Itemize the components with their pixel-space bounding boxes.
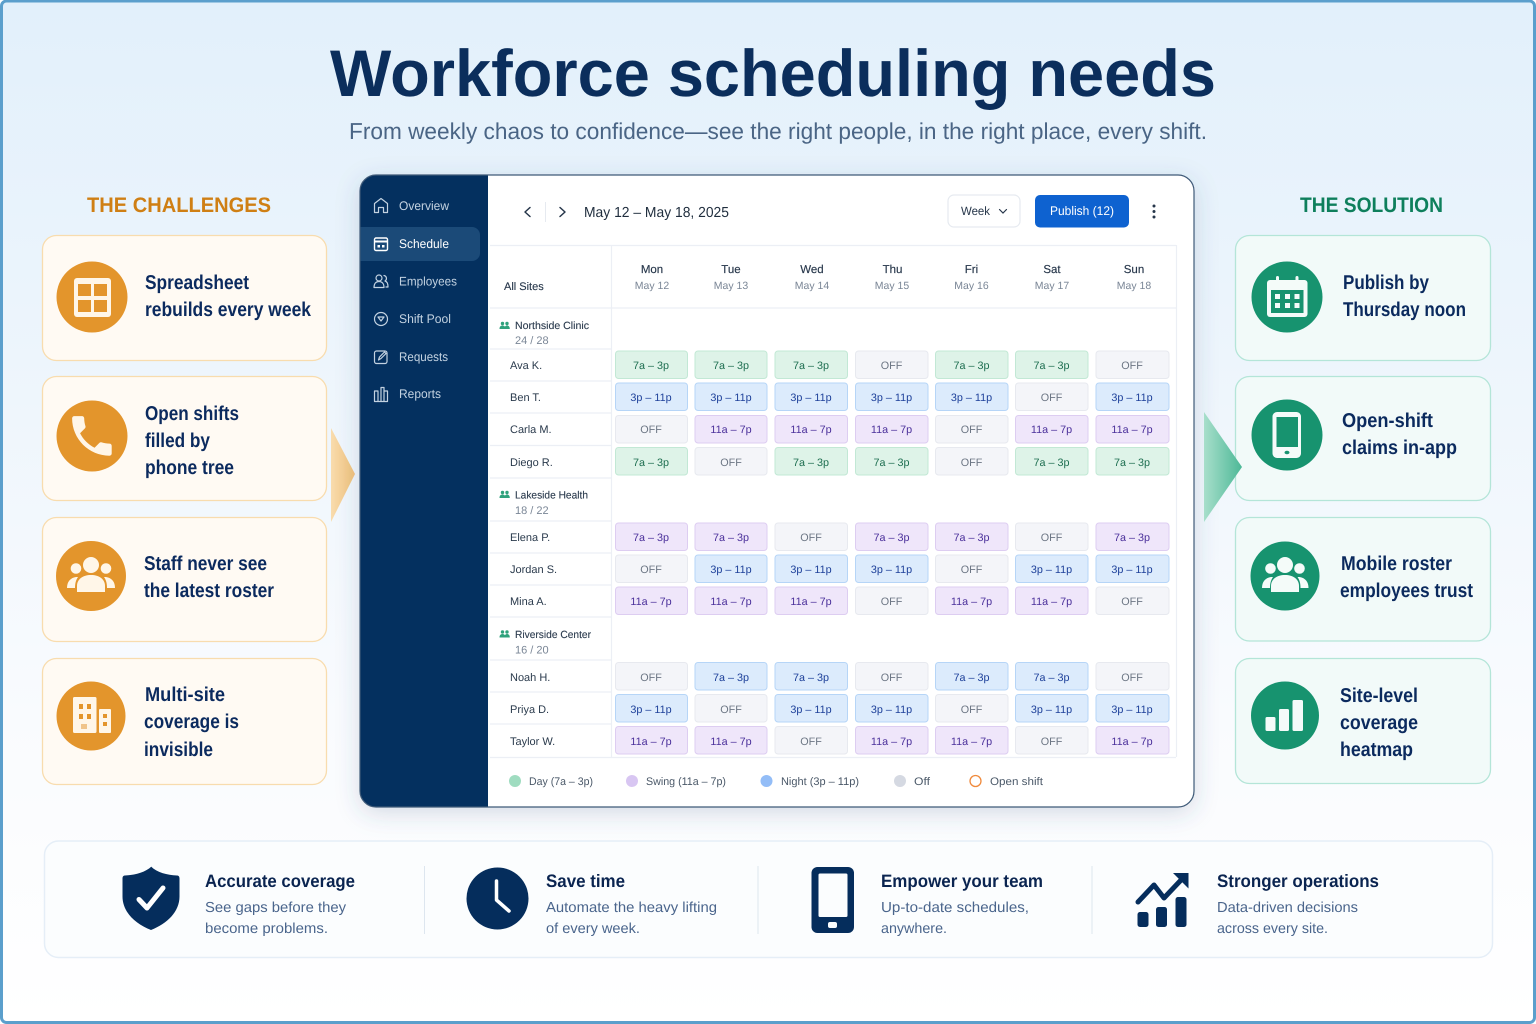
row: Carla M.: Carla M. bbox=[510, 424, 552, 436]
window outline bbox=[360, 175, 1194, 807]
icon: people bbox=[56, 541, 126, 611]
icon: clock bbox=[466, 868, 528, 930]
icon: buildings bbox=[56, 682, 126, 750]
heading: the solution: THE SOLUTION bbox=[1300, 194, 1443, 217]
arrow: challenges to app bbox=[331, 428, 355, 522]
challenge text: Staff never see bbox=[144, 553, 267, 575]
row: Diego R.: Diego R. bbox=[510, 457, 553, 469]
benefit: empower your team bbox=[812, 867, 1043, 937]
row: Diego R.: 7a – 3p bbox=[873, 457, 910, 469]
row: Taylor W.: OFF bbox=[1041, 736, 1063, 748]
legend: Swing (11a – 7p) bbox=[646, 776, 726, 788]
schedule header row: Wed bbox=[800, 264, 824, 276]
publish button bbox=[1035, 195, 1129, 228]
site: Riverside Center: Riverside Center bbox=[515, 629, 591, 641]
row: Ava K. bbox=[510, 351, 1169, 378]
nav item: employees: Employees bbox=[399, 274, 457, 288]
row: Ava K.: OFF bbox=[1121, 360, 1143, 372]
icon: spreadsheet grid bbox=[56, 262, 128, 332]
row: Carla M.: OFF bbox=[640, 424, 662, 436]
solution text: claims in-app bbox=[1342, 437, 1457, 459]
row: Carla M.: 11a – 7p bbox=[871, 424, 912, 436]
challenge text: rebuilds every week bbox=[145, 299, 312, 321]
site: Northside Clinic: 24 / 28 bbox=[515, 335, 549, 347]
nav item: reports: Reports bbox=[399, 387, 441, 401]
schedule header row: May 18 bbox=[1117, 280, 1151, 292]
row: Ava K.: OFF bbox=[881, 360, 903, 372]
row: Mina A. bbox=[510, 587, 1169, 614]
row: Jordan S.: 3p – 11p bbox=[710, 564, 752, 576]
panel: solution heatmap bbox=[1236, 658, 1490, 784]
row: Carla M.: 11a – 7p bbox=[1111, 424, 1153, 436]
row: Ben T.: 3p – 11p bbox=[710, 392, 752, 404]
row: Elena P.: 7a – 3p bbox=[873, 532, 910, 544]
row: Ben T.: Ben T. bbox=[510, 392, 541, 404]
benefit: stronger operations: Stronger operations bbox=[1217, 871, 1379, 891]
row: Elena P.: 7a – 3p bbox=[1114, 532, 1150, 544]
site: Lakeside Health: Lakeside Health bbox=[515, 490, 588, 502]
schedule header row: Fri bbox=[965, 264, 978, 276]
icon: calendar bbox=[1252, 262, 1322, 332]
row: Noah H. bbox=[510, 662, 1169, 690]
row: Jordan S.: OFF bbox=[640, 564, 662, 576]
row: Ava K.: 7a – 3p bbox=[953, 360, 990, 372]
row: Noah H.: 7a – 3p bbox=[713, 672, 749, 684]
row: Taylor W.: 11a – 7p bbox=[951, 736, 992, 748]
arrow: app to solution bbox=[1204, 412, 1242, 522]
row: Mina A.: Mina A. bbox=[510, 596, 547, 608]
row: Elena P.: OFF bbox=[800, 532, 822, 544]
schedule header row: May 15 bbox=[875, 280, 909, 292]
schedule header row: May 17 bbox=[1035, 280, 1069, 292]
row: Carla M.: 11a – 7p bbox=[790, 424, 832, 436]
schedule grid lines bbox=[490, 245, 1176, 758]
row: Priya D. bbox=[510, 694, 1169, 722]
benefit: stronger operations: Data-driven decisions bbox=[1217, 900, 1358, 916]
sidebar active item bbox=[360, 227, 480, 261]
row: Ben T.: 3p – 11p bbox=[630, 392, 672, 404]
row: Jordan S.: OFF bbox=[961, 564, 983, 576]
row: Taylor W.: 11a – 7p bbox=[630, 736, 672, 748]
icon: smartphone bbox=[1252, 400, 1322, 470]
row: Diego R.: 7a – 3p bbox=[1033, 457, 1070, 469]
row: Ava K.: Ava K. bbox=[510, 360, 542, 372]
row: Taylor W.: 11a – 7p bbox=[1111, 736, 1153, 748]
schedule header row: May 12 bbox=[635, 280, 669, 292]
challenge text: phone tree bbox=[145, 457, 234, 479]
benefit: accurate coverage: Accurate coverage bbox=[205, 871, 355, 891]
solution text: Site-level bbox=[1340, 685, 1418, 707]
schedule header row bbox=[504, 264, 1151, 293]
row: Elena P. bbox=[510, 523, 1169, 550]
row: Jordan S. bbox=[510, 555, 1169, 582]
challenge text: coverage is bbox=[144, 711, 239, 733]
row: Jordan S.: 3p – 11p bbox=[790, 564, 832, 576]
row: Ava K.: 7a – 3p bbox=[793, 360, 829, 372]
site: Lakeside Health: 18 / 22 bbox=[515, 505, 549, 517]
site: Riverside Center bbox=[500, 629, 591, 656]
benefit: save time bbox=[466, 868, 717, 937]
nav item: requests: Requests bbox=[399, 350, 448, 364]
row: Mina A.: OFF bbox=[881, 596, 903, 608]
solution text: employees trust bbox=[1340, 580, 1473, 602]
icon: bar chart bbox=[1251, 682, 1319, 750]
row: Priya D.: OFF bbox=[720, 704, 742, 716]
nav item: schedule: Schedule bbox=[399, 237, 449, 251]
solution text: heatmap bbox=[1340, 739, 1413, 761]
week selector bbox=[948, 195, 1020, 227]
schedule header row: Thu bbox=[883, 264, 902, 276]
heading: the challenges: THE CHALLENGES bbox=[87, 194, 271, 217]
nav item: requests bbox=[374, 350, 448, 364]
benefit: accurate coverage bbox=[122, 866, 355, 937]
panel: scheduling app window bbox=[360, 175, 1194, 807]
panel: challenge phone tree bbox=[42, 376, 326, 500]
benefit: stronger operations bbox=[1138, 871, 1379, 937]
schedule header row: All Sites bbox=[504, 281, 544, 293]
legend: Open shift bbox=[990, 776, 1043, 788]
row: Ben T.: 3p – 11p bbox=[951, 392, 992, 404]
row: Ava K.: 7a – 3p bbox=[713, 360, 749, 372]
site: Northside Clinic bbox=[500, 320, 589, 347]
row: Elena P.: 7a – 3p bbox=[713, 532, 749, 544]
challenge text: the latest roster bbox=[144, 580, 274, 602]
panel: challenge multi-site bbox=[42, 658, 326, 784]
solution text: Publish by bbox=[1343, 272, 1430, 294]
row: Noah H.: 7a – 3p bbox=[793, 672, 829, 684]
row: Noah H.: OFF bbox=[640, 672, 662, 684]
panel: solution publish bbox=[1236, 236, 1490, 360]
solution text bbox=[1340, 685, 1418, 761]
row: Noah H.: Noah H. bbox=[510, 672, 550, 684]
legend bbox=[509, 775, 1043, 788]
schedule header row: May 16 bbox=[954, 280, 989, 292]
nav item: shift pool bbox=[374, 312, 451, 326]
challenge text: filled by bbox=[145, 430, 211, 452]
row: Noah H.: OFF bbox=[1121, 672, 1143, 684]
row: Ben T.: OFF bbox=[1041, 392, 1063, 404]
subtitle: From weekly chaos to confidence—see the right people, in the right place, every shift. bbox=[349, 118, 1207, 144]
row: Priya D.: 3p – 11p bbox=[790, 704, 832, 716]
schedule header row: Tue bbox=[721, 264, 741, 276]
row: Mina A.: 11a – 7p bbox=[951, 596, 992, 608]
schedule header row: May 14 bbox=[795, 280, 829, 292]
nav item: shift pool: Shift Pool bbox=[399, 312, 451, 326]
row: Jordan S.: 3p – 11p bbox=[1111, 564, 1153, 576]
schedule header row: Sun bbox=[1124, 264, 1144, 276]
row: Elena P.: 7a – 3p bbox=[953, 532, 990, 544]
benefit: empower your team: Empower your team bbox=[881, 871, 1043, 891]
benefit: accurate coverage: become problems. bbox=[205, 921, 328, 937]
row: Mina A.: 11a – 7p bbox=[630, 596, 672, 608]
nav item: overview: Overview bbox=[399, 199, 450, 213]
row: Ava K.: 7a – 3p bbox=[633, 360, 669, 372]
site: Northside Clinic: Northside Clinic bbox=[515, 320, 589, 332]
row: Diego R.: OFF bbox=[961, 457, 983, 469]
more menu bbox=[1152, 204, 1156, 218]
benefit: empower your team: anywhere. bbox=[881, 921, 947, 937]
row: Taylor W.: Taylor W. bbox=[510, 736, 555, 748]
panel: solution open-shift bbox=[1236, 376, 1490, 500]
row: Elena P.: 7a – 3p bbox=[633, 532, 669, 544]
row: Carla M. bbox=[510, 416, 1169, 443]
row: Priya D.: Priya D. bbox=[510, 704, 549, 716]
row: Elena P.: Elena P. bbox=[510, 532, 550, 544]
row: Noah H.: 7a – 3p bbox=[1033, 672, 1070, 684]
panel: benefits strip bbox=[44, 841, 1492, 958]
nav item: employees bbox=[374, 274, 457, 288]
row: Priya D.: 3p – 11p bbox=[871, 704, 912, 716]
site: Riverside Center: 16 / 20 bbox=[515, 644, 549, 656]
nav item: schedule bbox=[374, 237, 449, 251]
schedule header row: Sat bbox=[1043, 264, 1061, 276]
challenge text: invisible bbox=[144, 739, 213, 761]
challenge text: Spreadsheet bbox=[145, 272, 249, 294]
row: Carla M.: 11a – 7p bbox=[710, 424, 752, 436]
benefit: stronger operations: across every site. bbox=[1217, 921, 1328, 937]
panel: challenge latest roster bbox=[42, 518, 326, 642]
benefit: save time: Save time bbox=[546, 871, 625, 891]
row: Diego R.: 7a – 3p bbox=[633, 457, 669, 469]
icon: people bbox=[1250, 542, 1320, 610]
row: Diego R. bbox=[510, 448, 1169, 475]
icon: growth chart bbox=[1138, 873, 1188, 927]
row: Jordan S.: Jordan S. bbox=[510, 564, 557, 576]
date range: May 12 – May 18, 2025 bbox=[584, 205, 729, 221]
row: Carla M.: OFF bbox=[961, 424, 983, 436]
benefit: save time: of every week. bbox=[546, 921, 640, 937]
row: Mina A.: 11a – 7p bbox=[1031, 596, 1072, 608]
row: Jordan S.: 3p – 11p bbox=[1031, 564, 1072, 576]
prev and next chevrons bbox=[525, 208, 565, 216]
row: Taylor W.: OFF bbox=[800, 736, 822, 748]
solution text: Open-shift bbox=[1342, 410, 1433, 432]
row: Mina A.: 11a – 7p bbox=[710, 596, 752, 608]
challenge text: Multi-site bbox=[145, 684, 225, 706]
title: Workforce scheduling needs bbox=[330, 36, 1216, 110]
row: Ben T.: 3p – 11p bbox=[1111, 392, 1153, 404]
legend: Off bbox=[914, 776, 931, 788]
panel: challenge spreadsheet bbox=[42, 236, 326, 360]
publish button: Publish (12) bbox=[1050, 204, 1114, 218]
row: Priya D.: 3p – 11p bbox=[1031, 704, 1072, 716]
row: Taylor W.: 11a – 7p bbox=[871, 736, 912, 748]
benefit: accurate coverage: See gaps before they bbox=[205, 900, 347, 916]
icon: phone handset bbox=[56, 400, 128, 472]
nav item: overview bbox=[374, 198, 450, 213]
row: Ben T. bbox=[510, 383, 1169, 410]
challenge text bbox=[144, 553, 274, 602]
row: Mina A.: 11a – 7p bbox=[790, 596, 832, 608]
row: Mina A.: OFF bbox=[1121, 596, 1143, 608]
icon: mobile phone bbox=[812, 867, 854, 933]
row: Priya D.: 3p – 11p bbox=[1111, 704, 1153, 716]
row: Noah H.: 7a – 3p bbox=[953, 672, 990, 684]
schedule header row: May 13 bbox=[714, 280, 748, 292]
row: Noah H.: OFF bbox=[881, 672, 903, 684]
panel: solution mobile roster bbox=[1236, 518, 1490, 641]
solution text bbox=[1343, 272, 1466, 321]
benefit: empower your team: Up-to-date schedules, bbox=[881, 900, 1029, 916]
row: Diego R.: OFF bbox=[720, 457, 742, 469]
challenge text: Open shifts bbox=[145, 403, 239, 425]
legend: Night (3p – 11p) bbox=[781, 776, 859, 788]
row: Priya D.: OFF bbox=[961, 704, 983, 716]
solution text: Thursday noon bbox=[1343, 299, 1466, 321]
row: Taylor W. bbox=[510, 726, 1169, 754]
solution text bbox=[1340, 553, 1473, 602]
solution text: coverage bbox=[1340, 712, 1418, 734]
week selector: Week bbox=[961, 204, 991, 218]
row: Diego R.: 7a – 3p bbox=[793, 457, 829, 469]
row: Diego R.: 7a – 3p bbox=[1114, 457, 1150, 469]
row: Priya D.: 3p – 11p bbox=[630, 704, 672, 716]
toolbar bbox=[525, 195, 1156, 228]
row: Carla M.: 11a – 7p bbox=[1031, 424, 1072, 436]
row: Ben T.: 3p – 11p bbox=[871, 392, 912, 404]
row: Ava K.: 7a – 3p bbox=[1033, 360, 1070, 372]
row: Jordan S.: 3p – 11p bbox=[871, 564, 912, 576]
solution text: Mobile roster bbox=[1341, 553, 1452, 575]
row: Taylor W.: 11a – 7p bbox=[710, 736, 752, 748]
site: Lakeside Health bbox=[500, 490, 588, 517]
nav item: reports bbox=[374, 387, 441, 402]
row: Elena P.: OFF bbox=[1041, 532, 1063, 544]
sidebar bbox=[360, 175, 488, 807]
icon: shield with check bbox=[122, 866, 180, 930]
challenge text bbox=[144, 684, 239, 761]
legend: Day (7a – 3p) bbox=[529, 776, 593, 788]
row: Ben T.: 3p – 11p bbox=[790, 392, 832, 404]
schedule header row: Mon bbox=[641, 264, 663, 276]
solution text bbox=[1342, 410, 1457, 459]
challenge text bbox=[145, 272, 312, 321]
challenge text bbox=[145, 403, 239, 479]
benefit: save time: Automate the heavy lifting bbox=[546, 900, 717, 916]
